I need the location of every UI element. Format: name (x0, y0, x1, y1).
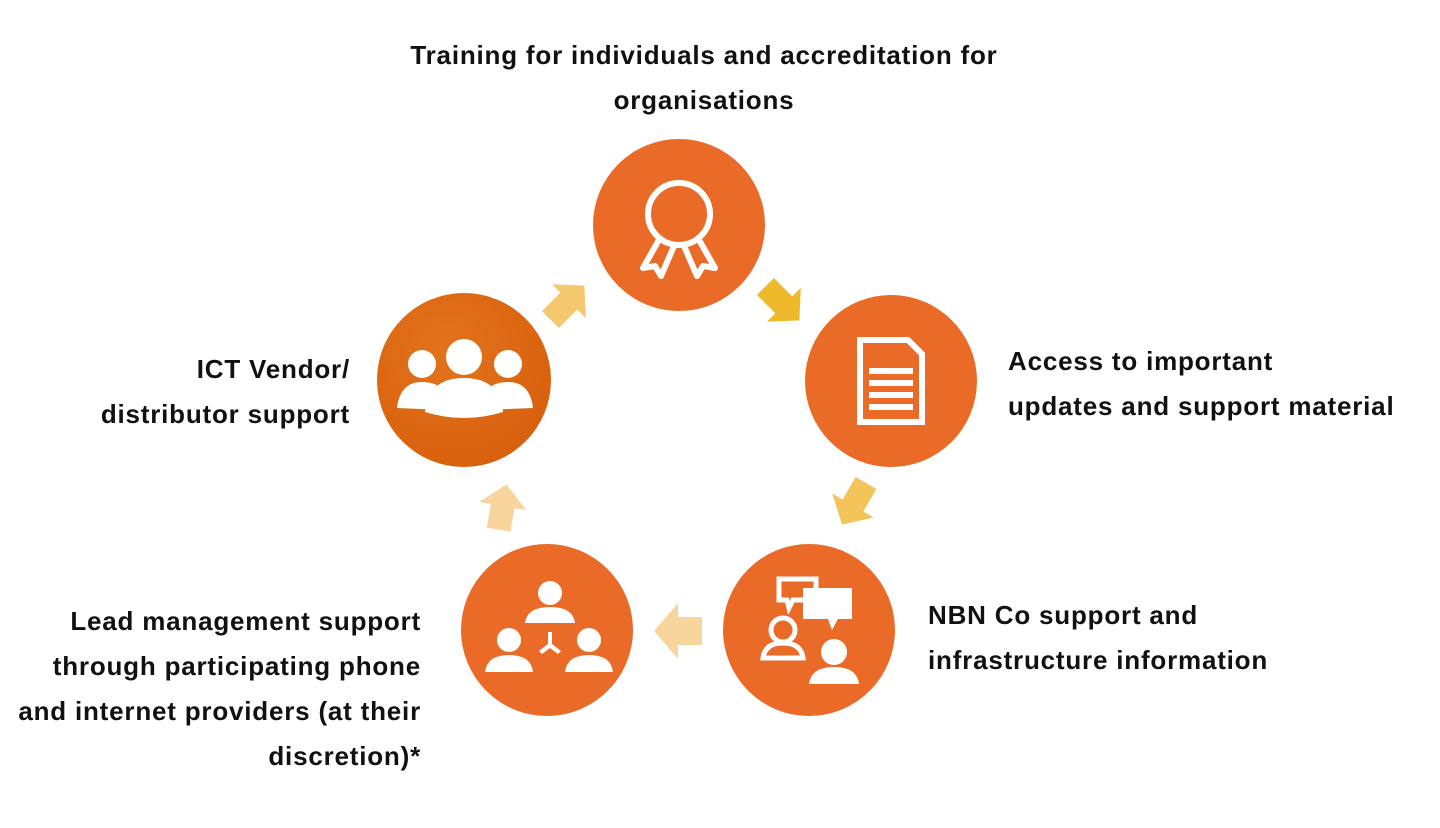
icon: network (485, 581, 613, 672)
text: lead management: through participating phone (53, 651, 421, 681)
text: access: updates and support material (1008, 391, 1394, 421)
arrow: document to NBN (821, 471, 887, 537)
arrow: lead to vendor (475, 480, 530, 534)
text: lead management: discretion)* (268, 741, 421, 771)
text: lead management: and internet providers (at their (18, 696, 421, 726)
icon: document (860, 340, 922, 422)
circle: NBN (723, 544, 895, 716)
title: Training for individuals and accreditation for (410, 40, 998, 70)
text: ICT vendor: ICT Vendor/ (197, 354, 350, 384)
circle: document (805, 295, 977, 467)
circle: vendor (377, 293, 551, 467)
icon: people (397, 339, 533, 418)
text: NBN (928, 600, 1268, 675)
title (410, 40, 998, 115)
text: ICT vendor: distributor support (101, 399, 350, 429)
icon: chat people (763, 579, 859, 684)
circle: lead management (461, 544, 633, 716)
text: NBN: infrastructure information (928, 645, 1268, 675)
arrow: vendor to training (533, 269, 601, 337)
arrow: NBN to lead (654, 603, 702, 659)
text: lead management: Lead management support (70, 606, 421, 636)
text: lead management (18, 606, 421, 771)
arrow: training to document (748, 269, 816, 337)
circle: training (593, 139, 765, 311)
title: organisations (614, 85, 794, 115)
text: NBN: NBN Co support and (928, 600, 1198, 630)
text: access: Access to important (1008, 346, 1273, 376)
text: ICT vendor (101, 354, 350, 429)
icon: ribbon (643, 183, 715, 276)
text: access (1008, 346, 1394, 421)
